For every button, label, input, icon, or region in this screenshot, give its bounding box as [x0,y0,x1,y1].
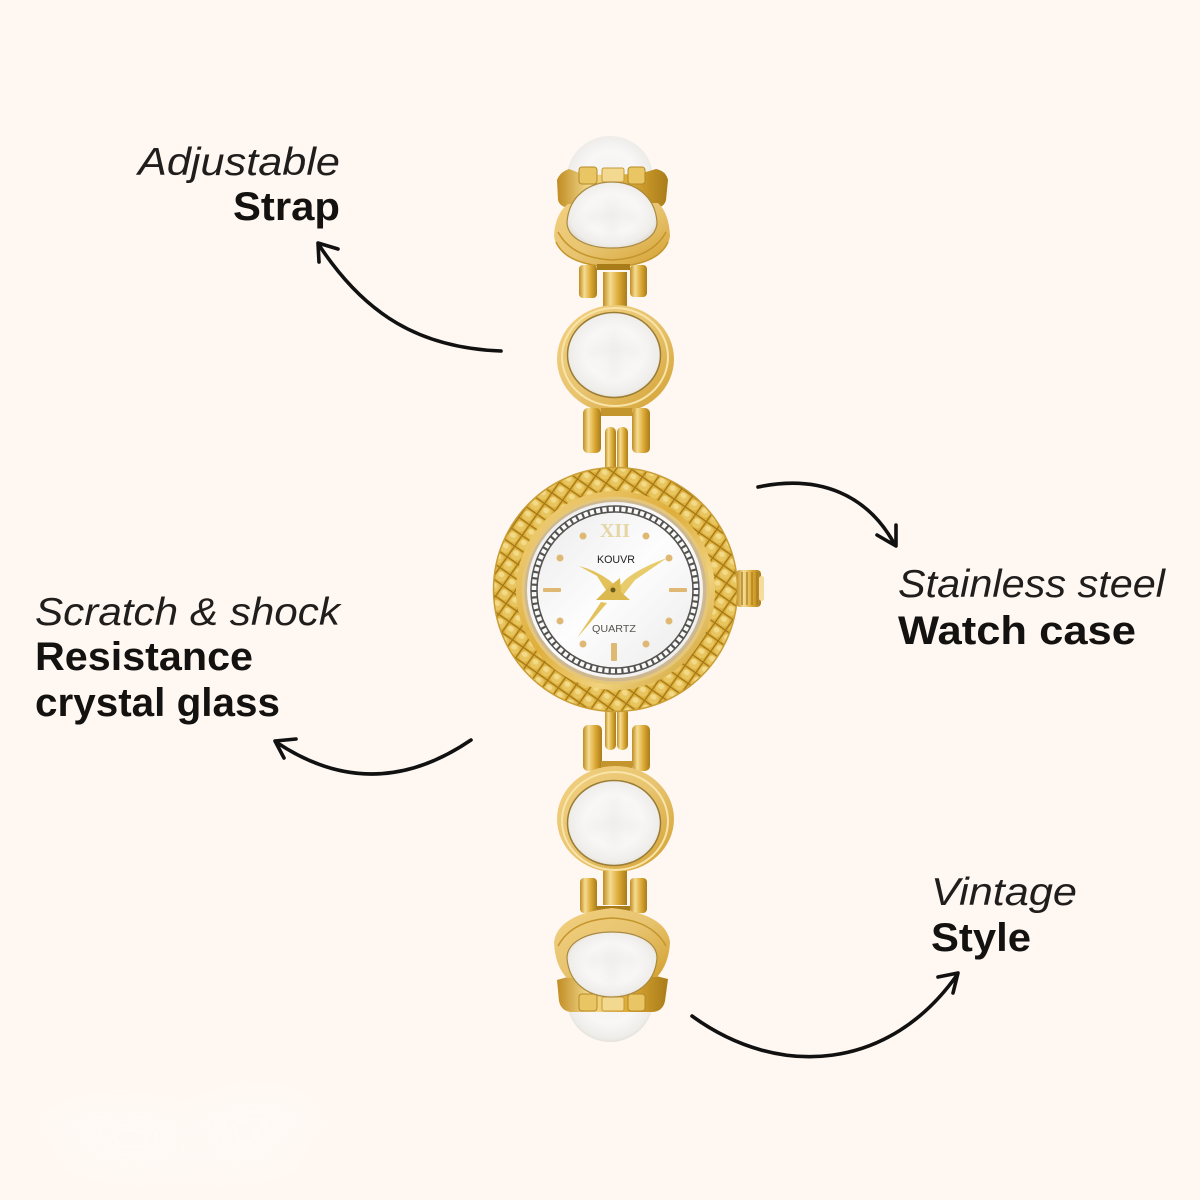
hour markers [543,520,687,661]
callout: Vintage Style [692,871,1077,1057]
brand: KOUVR [597,554,635,566]
faint smudge bottom-left [35,1086,325,1181]
bottom cup link [554,908,670,997]
label: Stainless steel [898,563,1166,606]
lower lugs and rods [583,708,650,771]
label: Vintage [931,871,1077,914]
callout: Adjustable Strap: Strap [233,185,340,229]
quartz: QUARTZ [592,624,636,635]
bottom clasp [557,976,668,1012]
crown [736,570,764,607]
top cup link [554,182,670,268]
upper lugs and rods [583,408,650,472]
callout: Adjustable Strap [136,141,501,351]
callout: Scratch and shock resistance: crystal glass [35,681,280,725]
callout: Stainless steel Watch case: Watch case [898,609,1136,653]
callout: Vintage Style: Style [931,916,1031,960]
callout: Scratch and shock resistance: Resistance [35,635,253,679]
bottom end pearl [567,958,653,1042]
arrow [692,973,958,1057]
second pearl link [557,305,674,413]
arrow [758,483,896,546]
callout: Scratch and shock resistance [35,591,471,774]
arrow [275,739,471,774]
bottom links [580,871,647,913]
top links [579,264,647,307]
dial [527,502,703,678]
hands [577,558,667,638]
top end pearl [567,136,653,220]
top clasp [557,167,668,208]
hour markers: XII [600,520,630,542]
watch case [493,467,738,712]
third pearl link [557,766,674,872]
callout: Stainless steel Watch case [758,483,1166,653]
arrow [318,243,501,351]
label: Scratch & shock [35,591,343,634]
label: Adjustable [136,141,340,184]
watch [493,136,764,1042]
